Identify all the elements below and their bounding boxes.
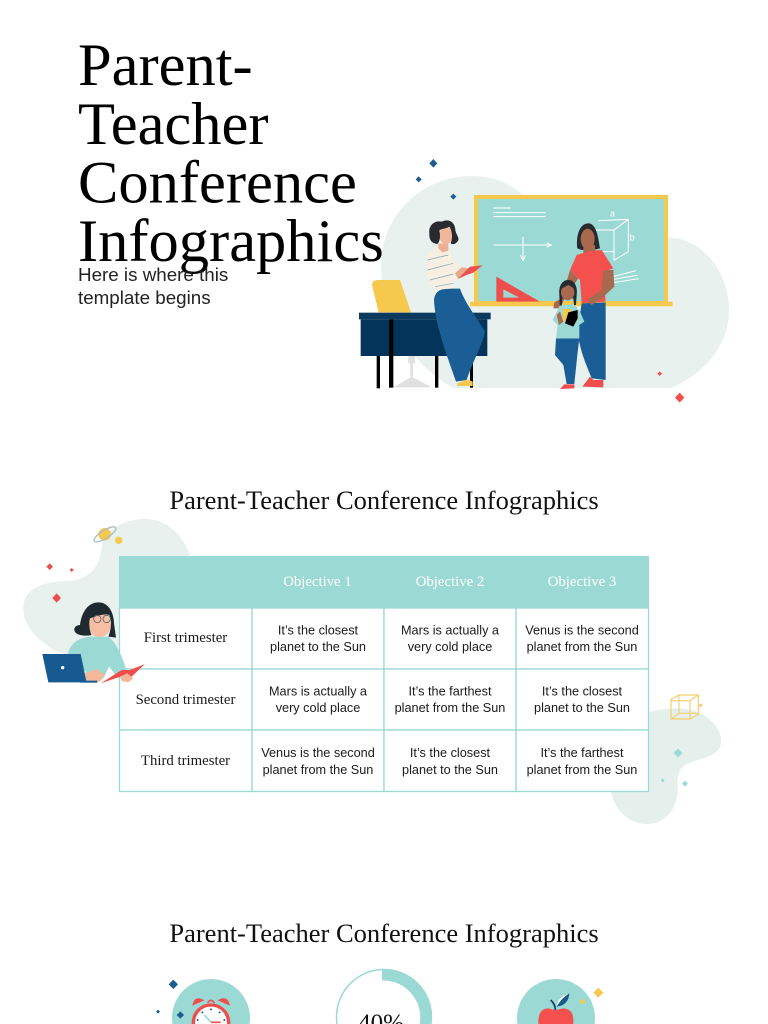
sweater <box>427 247 463 290</box>
table cell text: Venus is the second <box>525 624 639 638</box>
table cell text: planet from the Sun <box>395 701 505 715</box>
board letters: a <box>610 209 615 219</box>
table header row <box>119 556 649 608</box>
sparkles: teal <box>661 749 688 787</box>
row labels <box>136 630 235 769</box>
chart: 40% progress ring <box>336 969 432 1024</box>
parent and child <box>553 223 614 389</box>
chalkboard <box>470 197 673 306</box>
table body grid <box>120 608 648 792</box>
child hand <box>557 312 563 325</box>
row labels: First trimester <box>144 630 227 646</box>
planet <box>92 524 122 544</box>
child hair top <box>561 283 575 289</box>
table cell text: It’s the closest <box>410 746 491 760</box>
table cell text: Mars is actually a <box>401 624 500 638</box>
table cell text <box>261 624 639 777</box>
clock ticks <box>197 1008 225 1021</box>
table cell text: It’s the farthest <box>541 746 624 760</box>
parent face <box>581 229 595 249</box>
sparkles: red <box>46 563 74 603</box>
table cell text: very cold place <box>408 640 492 654</box>
sparkles: blue <box>416 159 456 200</box>
subtitle: Here is where this <box>78 264 228 285</box>
chalk drawings <box>493 208 639 283</box>
parent shoes <box>582 377 603 387</box>
table cell text: planet from the Sun <box>527 640 637 654</box>
teacher desk <box>359 313 491 388</box>
apple leaf <box>557 993 569 1007</box>
table cell text: Venus is the second <box>261 746 375 760</box>
student face <box>88 613 111 637</box>
apple stem <box>551 1000 555 1010</box>
child books <box>562 309 572 322</box>
student hair <box>74 602 116 638</box>
student glasses <box>94 615 110 623</box>
blob <box>23 519 192 658</box>
hair <box>429 220 459 244</box>
chair <box>372 280 432 387</box>
parent left arm <box>553 270 578 308</box>
title: Conference <box>78 150 357 216</box>
table cell text: planet from the Sun <box>527 763 637 777</box>
parent hair back <box>577 223 600 250</box>
child trousers <box>555 338 579 384</box>
table cell text: planet to the Sun <box>402 763 498 777</box>
student body <box>68 637 127 678</box>
table cell text: It’s the farthest <box>409 684 492 698</box>
badge circle <box>172 979 250 1024</box>
sweater stripes <box>427 255 453 287</box>
badge circle <box>517 979 595 1024</box>
child shoes <box>560 384 574 389</box>
column heads: Objective 1 <box>283 574 352 590</box>
ring value arc <box>382 969 432 1024</box>
clock hands <box>204 1015 221 1022</box>
row labels: Second trimester <box>136 692 235 708</box>
table cell text: It’s the closest <box>542 684 623 698</box>
parent hair top <box>580 227 596 233</box>
title: Infographics <box>78 208 384 275</box>
face <box>439 227 453 244</box>
left decoration blob <box>23 519 192 658</box>
red book <box>458 265 483 278</box>
table cell text: Mars is actually a <box>269 684 368 698</box>
title: Parent- <box>78 32 253 99</box>
sparkles: red <box>657 371 684 403</box>
blob <box>611 708 721 824</box>
wireframe cube <box>671 695 702 719</box>
teacher legs <box>434 289 485 386</box>
table <box>119 556 649 792</box>
set square <box>496 277 540 302</box>
open book <box>101 664 145 683</box>
column heads: Objective 3 <box>548 574 616 590</box>
child shirt <box>553 304 584 338</box>
apple <box>538 1008 573 1024</box>
illustration: teacher and parent at chalkboard <box>359 159 729 403</box>
table cell text: planet from the Sun <box>263 763 373 777</box>
laptop <box>42 654 97 683</box>
neck and face <box>438 243 448 253</box>
child hair back <box>559 280 577 306</box>
clock bells <box>192 998 230 1006</box>
teacher upper body <box>427 220 483 290</box>
child face <box>561 284 574 300</box>
sparkles: yellow <box>580 988 603 1005</box>
column heads <box>283 574 616 590</box>
section heading: objectives table: Parent-Teacher Conference Infographics <box>169 485 599 515</box>
table cell text: planet to the Sun <box>270 640 366 654</box>
student hand <box>120 673 133 682</box>
table cell text: It’s the closest <box>278 624 359 638</box>
icon: apple badge <box>517 979 603 1024</box>
section heading: stats: Parent-Teacher Conference Infographics <box>169 918 599 948</box>
background blob <box>381 176 729 388</box>
parent right arm <box>587 270 614 305</box>
parent trousers <box>578 302 606 380</box>
parent neck <box>583 245 595 254</box>
icon: alarm clock badge <box>156 979 250 1024</box>
student illustration <box>42 602 145 683</box>
hands <box>455 267 469 279</box>
parent shirt <box>570 250 613 303</box>
right decoration blob <box>611 695 721 824</box>
ring track <box>336 970 432 1024</box>
title: Teacher <box>78 91 269 158</box>
clock handle <box>208 1000 214 1003</box>
column heads: Objective 2 <box>416 574 484 590</box>
sparkles: blue <box>156 980 184 1019</box>
table cell text: planet to the Sun <box>534 701 630 715</box>
student arm <box>85 669 105 682</box>
chalkboard: b <box>630 233 635 243</box>
subtitle: template begins <box>78 287 211 308</box>
row labels: Third trimester <box>141 753 230 769</box>
table cell text: very cold place <box>276 701 360 715</box>
clock face <box>193 1005 229 1024</box>
